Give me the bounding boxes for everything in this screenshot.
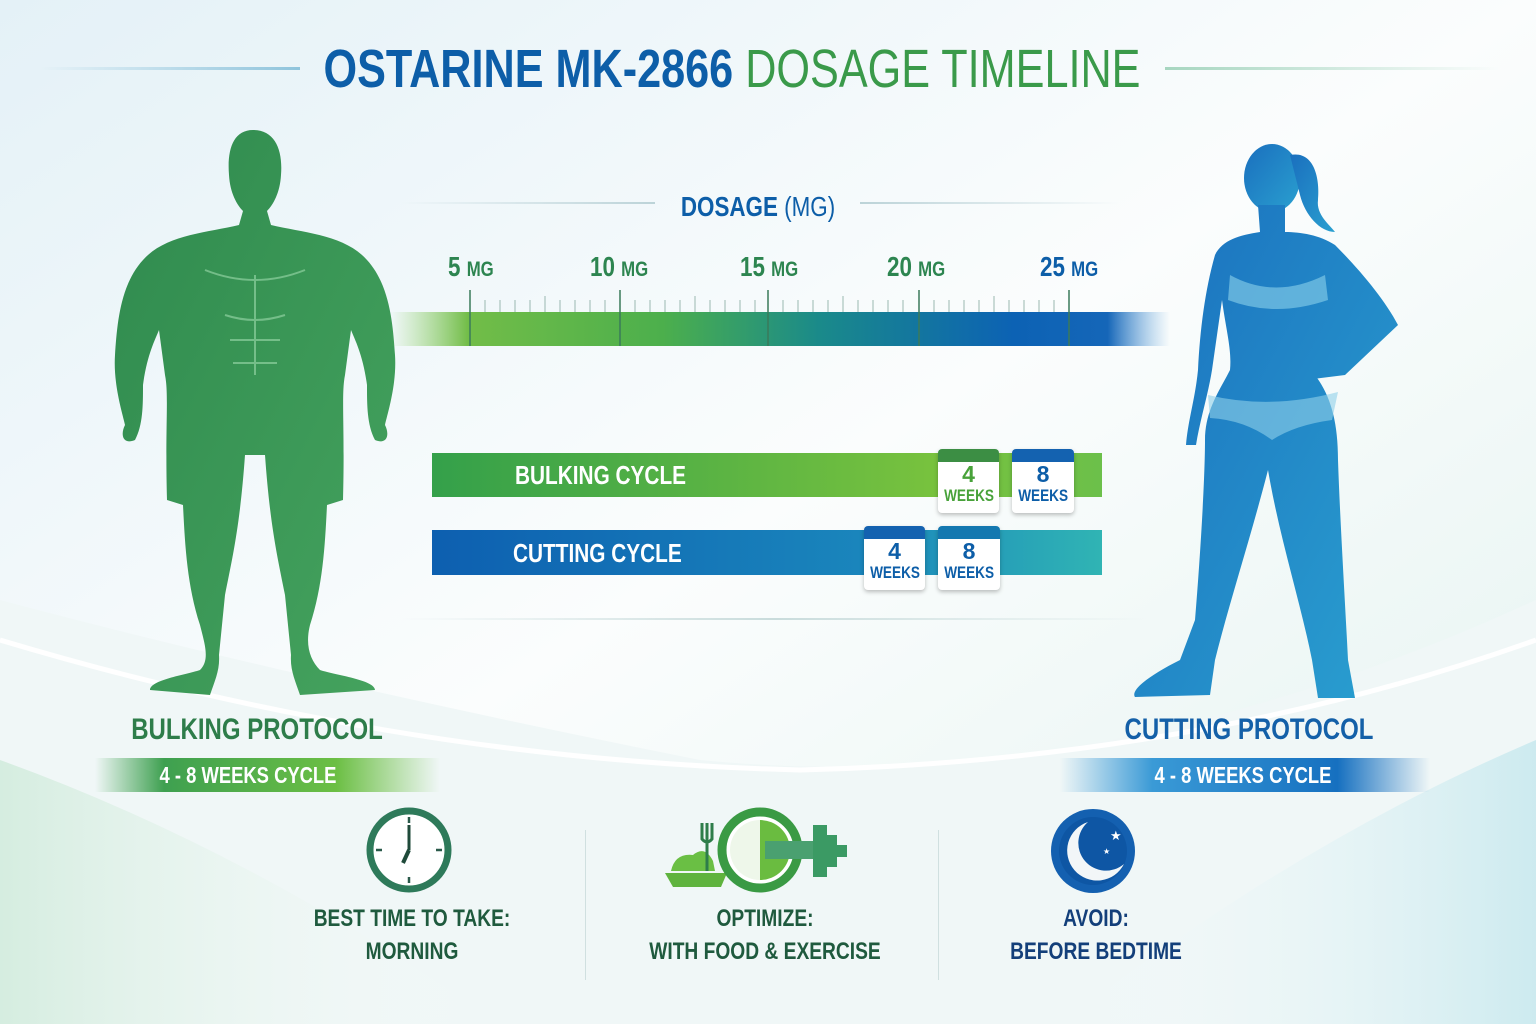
icon: moon (1051, 809, 1135, 893)
gradient bar (394, 290, 1167, 346)
calendar: bulking 8 weeks: WEEKS (1018, 486, 1068, 505)
text: best time: MORNING (366, 938, 458, 965)
icon: moon: ★ (1103, 847, 1110, 856)
calendar: cutting 4 weeks: WEEKS (870, 563, 920, 582)
cutting cycle bar: CUTTING CYCLE (513, 538, 682, 568)
text: avoid: AVOID: (1063, 905, 1129, 932)
man silhouette (114, 130, 396, 695)
dosage scale: 10 MG (590, 251, 648, 282)
cutting protocol heading: CUTTING PROTOCOL (1125, 713, 1373, 746)
calendar: bulking 4 weeks: WEEKS (944, 486, 994, 505)
calendar: cutting 8 weeks (938, 526, 1000, 590)
cutting cycle bar (432, 530, 1102, 575)
icon: moon: ★ (1110, 829, 1122, 844)
bulking cycle band (95, 758, 440, 792)
calendar: cutting 4 weeks (864, 526, 925, 590)
calendar: bulking 4 weeks: 4 (962, 461, 975, 487)
icon: clock (366, 808, 452, 892)
text: avoid: BEFORE BEDTIME (1010, 938, 1182, 965)
calendar: cutting 8 weeks: 8 (963, 538, 975, 564)
icon: food and exercise (665, 808, 847, 892)
calendar: cutting 8 weeks: WEEKS (944, 563, 994, 582)
tick labels: 5 MG (448, 251, 494, 282)
dosage heading: DOSAGE (MG) (681, 191, 835, 222)
calendar: cutting 4 weeks: 4 (888, 538, 901, 564)
bulking cycle bar (432, 453, 1102, 497)
cutting cycle band: 4 - 8 WEEKS CYCLE (1155, 762, 1331, 788)
text: optimize: OPTIMIZE: (716, 905, 814, 932)
text: avoid (1010, 905, 1182, 965)
calendar: bulking 8 weeks: 8 (1037, 461, 1049, 487)
bulking protocol heading: BULKING PROTOCOL (131, 713, 383, 746)
bulking cycle band: 4 - 8 WEEKS CYCLE (160, 762, 336, 788)
cutting cycle band (1060, 758, 1430, 792)
text: optimize (649, 905, 881, 965)
dosage scale: 20 MG (887, 251, 945, 282)
bulking cycle bar: BULKING CYCLE (515, 460, 686, 490)
calendar: bulking 8 weeks (1012, 449, 1074, 513)
calendar: bulking 4 weeks (938, 449, 999, 513)
woman silhouette (1134, 144, 1398, 698)
dosage scale: 15 MG (740, 251, 798, 282)
title: OSTARINE MK-2866 DOSAGE TIMELINE (323, 39, 1140, 99)
text: best time: BEST TIME TO TAKE: (314, 905, 510, 932)
text: best time (314, 905, 510, 965)
dosage scale: 25 MG (1040, 251, 1098, 282)
dosage scale (394, 191, 1167, 346)
text: optimize: WITH FOOD & EXERCISE (649, 938, 881, 965)
